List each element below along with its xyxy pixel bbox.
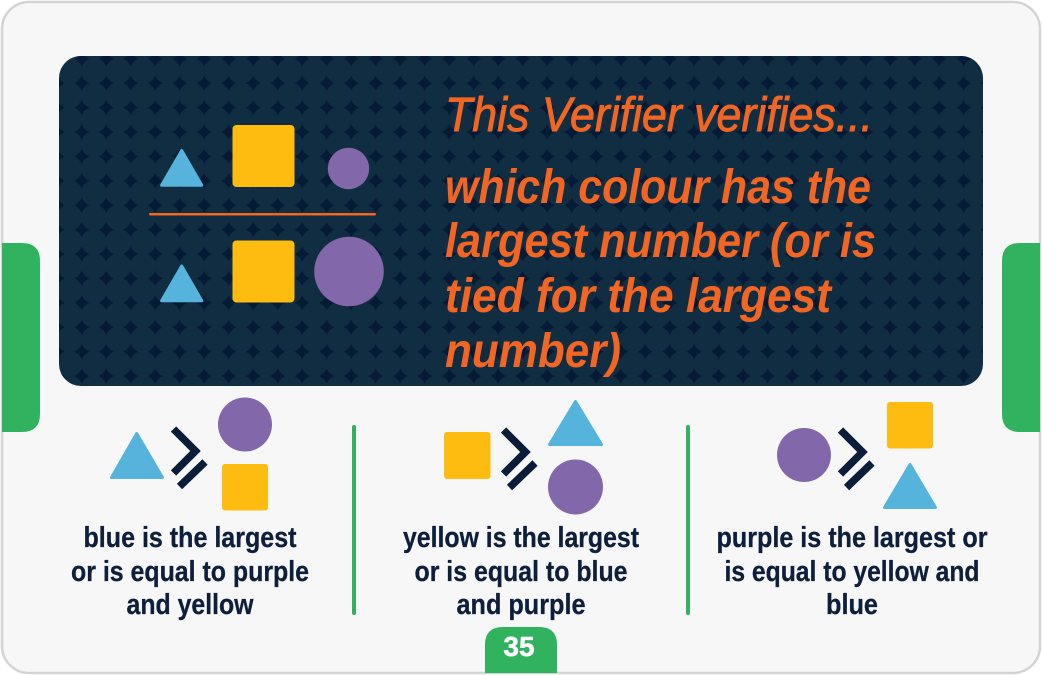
icon: greater or equal sign <box>174 429 205 486</box>
icon: greater or equal sign <box>504 430 535 488</box>
page number: 35 <box>503 631 535 662</box>
icon: yellow square <box>222 464 268 510</box>
icon group: top row shapes <box>162 125 369 189</box>
rule text: is equal to yellow and <box>724 556 980 588</box>
icon group: bottom row shapes <box>162 237 384 306</box>
statement text <box>445 161 876 378</box>
icon: greater or equal sign <box>840 430 872 488</box>
statement text: number) <box>445 325 621 378</box>
rule text: blue is the largest <box>84 522 297 554</box>
rule text <box>403 522 639 621</box>
rule text: or is equal to blue <box>414 556 628 588</box>
rule text: or is equal to purple <box>71 556 309 588</box>
icon: blue triangle <box>112 434 162 478</box>
icon: purple circle <box>777 428 831 482</box>
statement text: largest number (or is <box>445 215 876 268</box>
panel: blue rule <box>71 398 309 621</box>
icon: blue triangle <box>550 402 602 444</box>
icon: purple circle <box>218 398 272 452</box>
rule text: yellow is the largest <box>403 522 639 554</box>
divider line <box>149 213 376 216</box>
statement text: which colour has the <box>445 161 871 214</box>
rule text: and purple <box>456 589 586 621</box>
right green tab <box>1002 243 1040 432</box>
panel: verifier header <box>59 56 983 386</box>
heading: This Verifier verifies... <box>445 89 873 142</box>
column divider <box>686 425 690 615</box>
statement text: tied for the largest <box>445 270 833 323</box>
panel: purple rule <box>716 402 988 621</box>
rule text: blue <box>826 589 878 621</box>
rule text <box>716 522 988 621</box>
panel: yellow rule <box>403 402 639 621</box>
rule text: purple is the largest or <box>716 522 988 554</box>
icon: yellow square <box>444 432 490 479</box>
column divider <box>352 425 356 615</box>
icon: purple circle <box>548 460 603 514</box>
page number <box>485 627 557 673</box>
rule text <box>71 522 309 621</box>
left green tab <box>2 243 40 432</box>
icon: yellow square <box>887 402 933 448</box>
rule text: and yellow <box>126 589 254 621</box>
icon: blue triangle <box>884 464 936 508</box>
